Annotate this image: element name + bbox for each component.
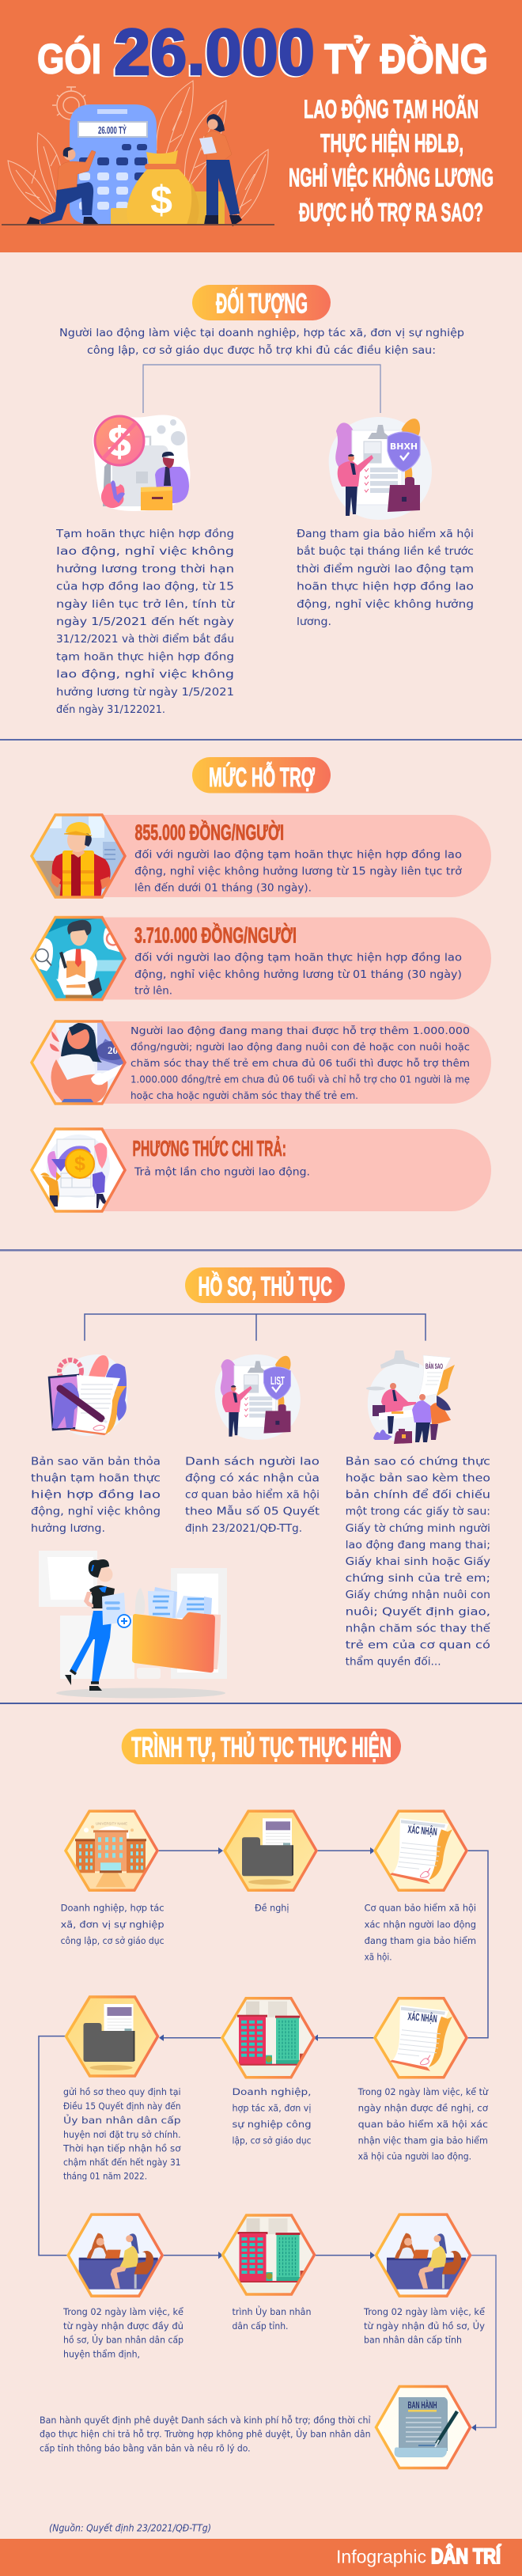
icon: social insurance xyxy=(329,417,432,520)
step 5 text: Doanh nghiệp, xyxy=(233,2086,312,2097)
step 6 text: gửi hồ sơ theo quy định tại xyxy=(63,2086,181,2097)
heading pill xyxy=(192,757,331,793)
title: GÓI xyxy=(37,36,101,83)
column 1 text: Bản sao văn bản thỏa xyxy=(31,1455,161,1468)
step 4 text: nhận việc tham gia bảo hiểm xyxy=(358,2135,488,2146)
icon: office worker hexagon xyxy=(31,915,126,1000)
column 3 text: một trong các giấy tờ sau: xyxy=(346,1506,490,1518)
icon: social insurance: BHXH xyxy=(390,441,418,452)
title: 26.000 xyxy=(114,15,315,89)
left condition text: Tạm hoãn thực hiện hợp đồng xyxy=(55,527,234,540)
step 7 text: từ ngày nhận được đầy đủ xyxy=(63,2320,183,2332)
step 3 text: đang tham gia bảo hiểm xyxy=(365,1935,476,1946)
icon: payment hexagon xyxy=(31,1128,126,1212)
row: payment method: PHƯƠNG THỨC CHI TRẢ: xyxy=(133,1135,286,1161)
footer credit xyxy=(336,2544,501,2568)
section: trình tự, thủ tục thực hiện xyxy=(39,1729,496,2470)
right condition text: Đang tham gia bảo hiểm xã hội xyxy=(297,527,474,540)
left condition text: lao động, nghỉ việc không xyxy=(56,669,234,681)
row 3 text: hoặc cha hoặc người chăm sóc thay thế trẻ em. xyxy=(130,1089,358,1101)
step 7: desk hexagon xyxy=(66,2213,165,2298)
row 1 text: lên đến dưới 01 tháng (30 ngày). xyxy=(134,881,312,895)
left condition text: 31/12/2021 và thời điểm bắt đầu xyxy=(56,632,234,646)
heading pill: MỨC HỖ TRỢ xyxy=(209,763,315,793)
column 3 text: lao động đang mang thai; xyxy=(346,1539,490,1551)
right condition text: thời điểm người lao động tạm xyxy=(297,562,474,575)
footer credit: Infographic xyxy=(336,2547,426,2567)
step 6 text: tháng 01 năm 2022. xyxy=(63,2171,147,2182)
row 3 text: chăm sóc thay thế trẻ em chưa đủ 06 tuổi thì được hỗ trợ thêm xyxy=(130,1057,470,1069)
step 2: folder hexagon xyxy=(223,1809,318,1892)
icon: payment hexagon: $ xyxy=(74,1153,85,1175)
icon: certified copy xyxy=(366,1351,455,1444)
step 7 text: Trong 02 ngày làm việc, kể xyxy=(62,2306,183,2317)
row: 855.000 xyxy=(31,814,491,900)
step 7 text xyxy=(62,2306,183,2359)
column 3 text: trẻ em của cơ quan có xyxy=(346,1639,490,1652)
step 8 text: trình Ủy ban nhân xyxy=(233,2305,312,2317)
footer credit: DÂN TRÍ xyxy=(431,2544,501,2568)
step 10: issued decision hexagon xyxy=(374,2385,472,2470)
icon: pregnant woman hexagon xyxy=(31,1021,128,1105)
row 3 text: Người lao động đang mang thai được hỗ trợ thêm 1.000.000 xyxy=(130,1025,470,1036)
step 4 text: Trong 02 ngày làm việc, kể từ xyxy=(357,2086,489,2097)
icon: certified copy: BẢN SAO xyxy=(426,1362,443,1370)
column 3 text: Giấy khai sinh hoặc Giấy xyxy=(346,1555,490,1568)
step 4: confirmation hexagon: XÁC NHẬN xyxy=(407,2010,437,2025)
heading pill xyxy=(122,1729,401,1764)
title xyxy=(37,15,488,90)
flow connectors and arrows xyxy=(39,1847,496,2431)
step 3 text: Cơ quan bảo hiểm xã hội xyxy=(365,1903,476,1914)
step 9 text: Trong 02 ngày làm việc, kể xyxy=(363,2306,485,2317)
column 2 text: động có xác nhận của xyxy=(185,1472,320,1484)
step 5 text: hợp tác xã, đơn vị xyxy=(233,2103,312,2114)
step 4 text xyxy=(357,2086,489,2162)
icon: list: LIST xyxy=(270,1374,285,1388)
step 4 text: xã hội của người lao động. xyxy=(358,2151,471,2162)
right condition text: lương. xyxy=(297,616,331,628)
header banner xyxy=(0,0,522,252)
intro text: công lập, cơ sở giáo dục được hỗ trợ khi đủ các điều kiện sau: xyxy=(87,343,436,357)
column 3 text: hoặc bản sao kèm theo xyxy=(346,1472,490,1484)
step 5 text: sự nghiệp công xyxy=(233,2119,312,2130)
icon: worker hexagon xyxy=(31,814,126,900)
step 8 text: dân cấp tỉnh. xyxy=(233,2320,288,2332)
row 3 text xyxy=(130,1025,470,1101)
column 3 text: nhận chăm sóc thay thế xyxy=(346,1621,491,1635)
title: 26.000 xyxy=(112,16,313,90)
right condition text: bắt buộc tại tháng liền kề trước xyxy=(297,544,474,558)
step 10 text: cấp tỉnh thông báo bằng văn bản và nêu rõ lý do. xyxy=(40,2442,251,2453)
row 2 text xyxy=(134,950,462,997)
heading pill: HỒ SƠ, THỦ TỤC xyxy=(198,1272,332,1302)
column 2 text: định 23/2021/QĐ-TTg. xyxy=(185,1522,302,1535)
left condition text: hưởng lương trong thời hạn xyxy=(56,563,234,575)
heading pill xyxy=(185,1267,345,1303)
left condition text: lao động, nghỉ việc không xyxy=(56,545,234,558)
column 3 text: Giấy chứng nhận nuôi con xyxy=(346,1589,490,1601)
step 6 text xyxy=(62,2086,181,2182)
header illustration: calculator, money bag, two people xyxy=(2,81,274,226)
step 10 text: Ban hành quyết định phê duyệt Danh sách và kinh phí hỗ trợ; đồng thời chỉ xyxy=(40,2415,371,2426)
right condition text xyxy=(297,527,474,628)
step 4 text: quan bảo hiểm xã hội xác xyxy=(358,2119,488,2130)
right condition text: động, nghỉ việc không hưởng xyxy=(297,598,474,611)
step 10: issued decision hexagon: BAN HÀNH xyxy=(408,2400,437,2411)
step 1: enterprise hexagon xyxy=(64,1809,159,1892)
step 1 text: Doanh nghiệp, hợp tác xyxy=(61,1903,165,1914)
icon: signed agreement xyxy=(49,1354,127,1436)
step 7 text: hồ sơ, Ủy ban nhân dân cấp xyxy=(63,2333,183,2346)
section: đối tượng xyxy=(55,285,474,716)
step 6 text: chậm nhất đến hết ngày 31 xyxy=(63,2157,181,2168)
left condition text: tạm hoãn thực hiện hợp đồng xyxy=(56,650,234,663)
step 5 text: lập, cơ sở giáo dục xyxy=(233,2135,312,2146)
row: 3.710.000 xyxy=(31,915,491,1000)
column 3 text: bản chính để đối chiếu xyxy=(346,1488,490,1502)
column 1 text: thuận tạm hoãn thực xyxy=(31,1472,161,1484)
row 1 text: đối với người lao động tạm hoãn thực hiện hợp đồng lao xyxy=(134,848,462,862)
step 9: desk hexagon xyxy=(374,2213,472,2298)
header illustration: calculator, money bag, two people: $ xyxy=(150,178,172,222)
left condition text: của hợp đồng lao động, từ 15 xyxy=(56,580,234,593)
column 2 text: theo Mẫu số 05 Quyết xyxy=(185,1505,320,1518)
step 10 text: đạo thực hiện chi trả hỗ trợ. Trường hợp không phê duyệt, Ủy ban nhân dân xyxy=(40,2427,371,2440)
icon: no salary xyxy=(93,415,190,511)
row 3 text: đồng/người; người lao động đang nuôi con đẻ hoặc con nuôi hoặc xyxy=(130,1041,470,1052)
header illustration: calculator, money bag, two people: 26.000 TỶ xyxy=(98,124,127,136)
row: pregnancy support xyxy=(31,1021,491,1105)
step 10 text xyxy=(40,2415,371,2453)
column 2 text: Danh sách người lao xyxy=(185,1455,320,1468)
row 1 text: động, nghỉ việc không hưởng lương từ 15 ngày liên tục trở xyxy=(134,866,463,878)
row 3 text: 1.000.000 đồng/trẻ em chưa đủ 06 tuổi và chỉ hỗ trợ cho 01 người là mẹ xyxy=(130,1074,470,1085)
step 7 text: huyện thẩm định, xyxy=(63,2348,140,2359)
section: mức hỗ trợ xyxy=(31,757,491,1212)
step 1 text: công lập, cơ sở giáo dục xyxy=(61,1935,165,1946)
step 6 text: Điều 15 Quyết định này đến xyxy=(63,2101,181,2112)
column 3 text: thẩm quyền đối... xyxy=(346,1655,441,1669)
step 5 text xyxy=(233,2086,312,2146)
title: TỶ ĐỒNG xyxy=(324,36,488,83)
heading pill xyxy=(192,285,331,320)
column 3 text: nuôi; Quyết định giao, xyxy=(346,1604,490,1618)
icon: list xyxy=(215,1354,301,1440)
left condition text: đến ngày 31/122021. xyxy=(56,703,165,716)
left condition text xyxy=(55,527,236,716)
source note: (Nguồn: Quyết định 23/2021/QĐ-TTg) xyxy=(49,2522,211,2534)
section: hồ sơ, thủ tục xyxy=(31,1267,491,1698)
step 3 text: xác nhận người lao động xyxy=(365,1919,476,1930)
step 1: enterprise hexagon: UNIVERSITY NAME xyxy=(96,1821,127,1825)
row 2 text: đối với người lao động tạm hoãn thực hiện hợp đồng lao xyxy=(134,950,462,964)
column 1 text: hiện hợp đồng lao xyxy=(31,1488,161,1502)
column 3 text: chứng sinh của trẻ em; xyxy=(346,1572,490,1585)
step 6 text: Thời hạn tiếp nhận hồ sơ xyxy=(62,2142,181,2154)
row 2 text: trở lên. xyxy=(134,984,172,997)
step 2 text: Đề nghị xyxy=(255,1903,289,1914)
step 8: buildings hexagon xyxy=(221,2214,316,2298)
icon: no salary: $ xyxy=(108,419,131,465)
illustration: woman filing documents xyxy=(39,1551,227,1698)
step 3 text: xã hội. xyxy=(365,1951,392,1962)
column 1 text xyxy=(31,1455,161,1535)
right condition text: hoãn thực hiện hợp đồng lao xyxy=(297,580,474,593)
row 1 text xyxy=(134,848,463,895)
step 5: buildings hexagon xyxy=(221,1997,316,2081)
step 6 text: huyện nơi đặt trụ sở chính. xyxy=(63,2129,181,2140)
row: 855.000: 855.000 ĐỒNG/NGƯỜI xyxy=(134,820,284,844)
step 4: confirmation hexagon xyxy=(373,1997,468,2079)
step 9 text: từ ngày nhận đủ hồ sơ, Ủy xyxy=(364,2319,485,2332)
step 4 text: ngày nhận được đề nghị, cơ xyxy=(358,2103,488,2114)
column 3 text: Bản sao có chứng thực xyxy=(346,1455,490,1468)
footer xyxy=(0,2539,522,2576)
step 1 text xyxy=(61,1903,165,1946)
intro text xyxy=(59,327,464,357)
subtitle xyxy=(289,95,494,226)
column 1 text: hưởng lương. xyxy=(31,1522,105,1535)
left condition text: hưởng lương từ ngày 1/5/2021 xyxy=(56,686,234,699)
row: 3.710.000: 3.710.000 ĐỒNG/NGƯỜI xyxy=(134,922,297,948)
left condition text: ngày liên tục trở lên, tính từ xyxy=(56,598,236,611)
step 1 text: xã, đơn vị sự nghiệp xyxy=(61,1919,165,1930)
step 6: folder hexagon xyxy=(65,1995,160,2078)
step 9 text: ban nhân dân cấp tỉnh xyxy=(364,2335,462,2346)
heading pill: ĐỐI TƯỢNG xyxy=(216,288,308,320)
icon: pregnant woman hexagon: 202 xyxy=(108,1044,123,1056)
step 9 text xyxy=(363,2306,485,2346)
column 1 text: động, nghỉ việc không xyxy=(31,1506,161,1518)
column 2 text: cơ quan bảo hiểm xã hội xyxy=(185,1488,320,1502)
step 6 text: Ủy ban nhân dân cấp xyxy=(63,2113,181,2126)
step 8 text xyxy=(233,2305,312,2332)
row 2 text: động, nghỉ việc không hưởng lương từ 01 tháng (30 ngày) xyxy=(134,968,462,981)
step 3: confirmation hexagon: XÁC NHẬN xyxy=(407,1824,437,1838)
column 3 text: Giấy tờ chứng minh người xyxy=(346,1522,490,1535)
intro text: Người lao động làm việc tại doanh nghiệp, hợp tác xã, đơn vị sự nghiệp xyxy=(59,327,464,339)
left condition text: ngày 1/5/2021 đến hết ngày xyxy=(56,615,234,628)
row: payment method: Trả một lần cho người lao động. xyxy=(134,1166,310,1179)
column 2 text xyxy=(185,1455,320,1535)
column 3 text xyxy=(346,1455,491,1669)
step 3 text xyxy=(365,1903,476,1962)
row: payment method xyxy=(31,1128,491,1212)
step 3: confirmation hexagon xyxy=(373,1809,468,1892)
